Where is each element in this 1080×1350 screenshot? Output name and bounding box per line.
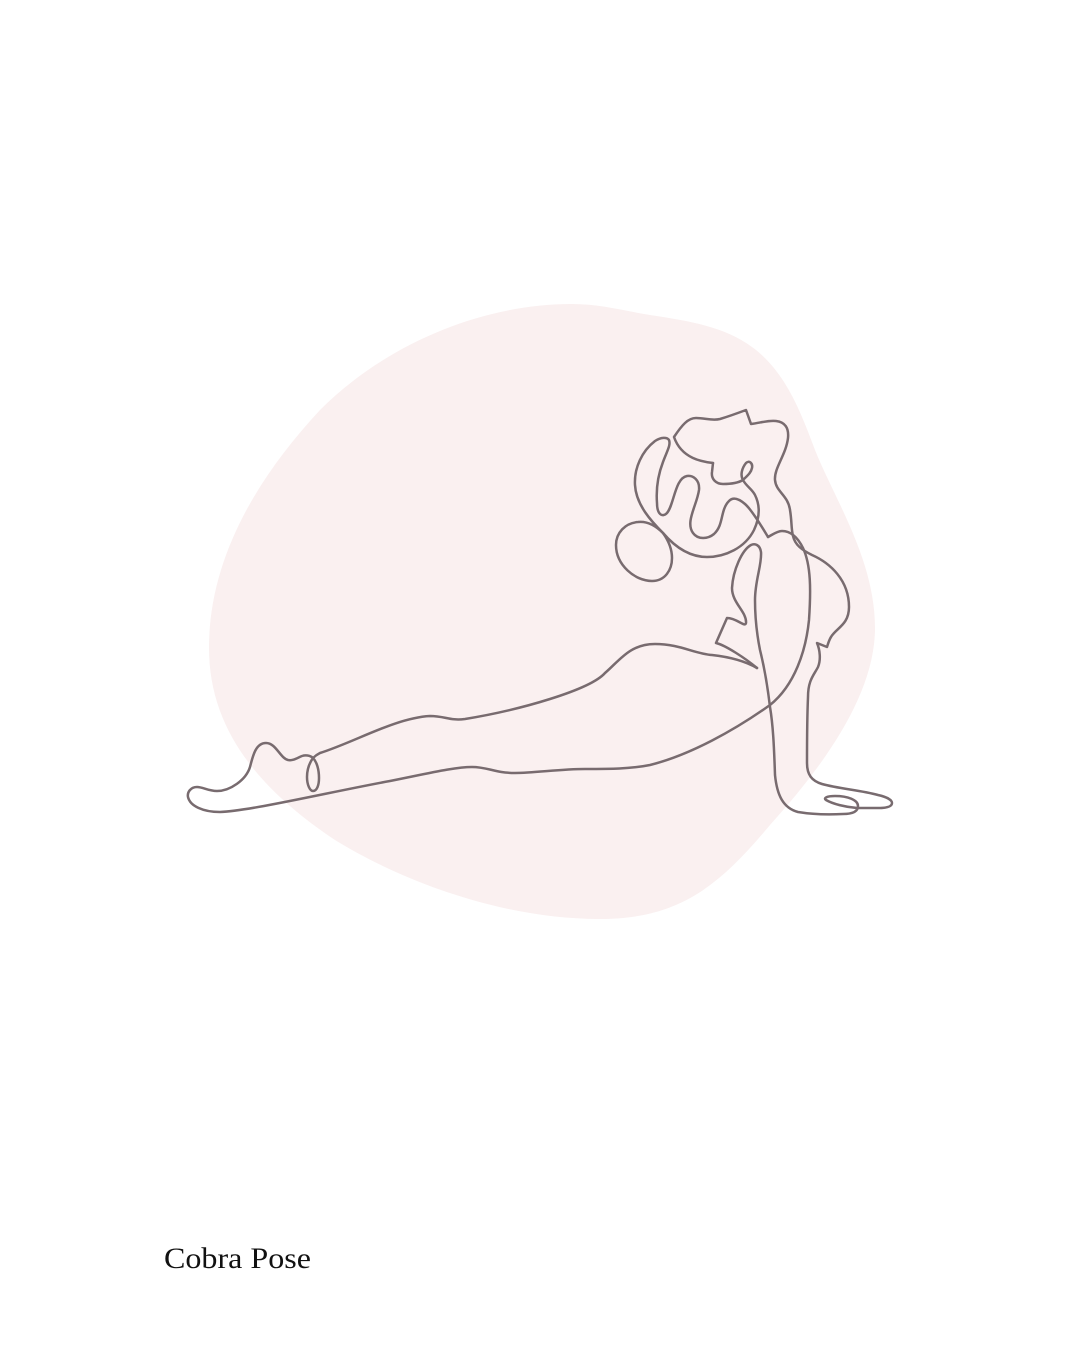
face, neck, shoulder, arm and hand [674,410,892,814]
pink background blob [209,304,875,919]
caption: Cobra Pose: Cobra Pose [164,1242,311,1275]
hair waves [635,438,768,557]
hair bun [616,522,672,581]
line art: woman in cobra pose [188,410,892,814]
legs, foot and torso line [188,531,810,812]
